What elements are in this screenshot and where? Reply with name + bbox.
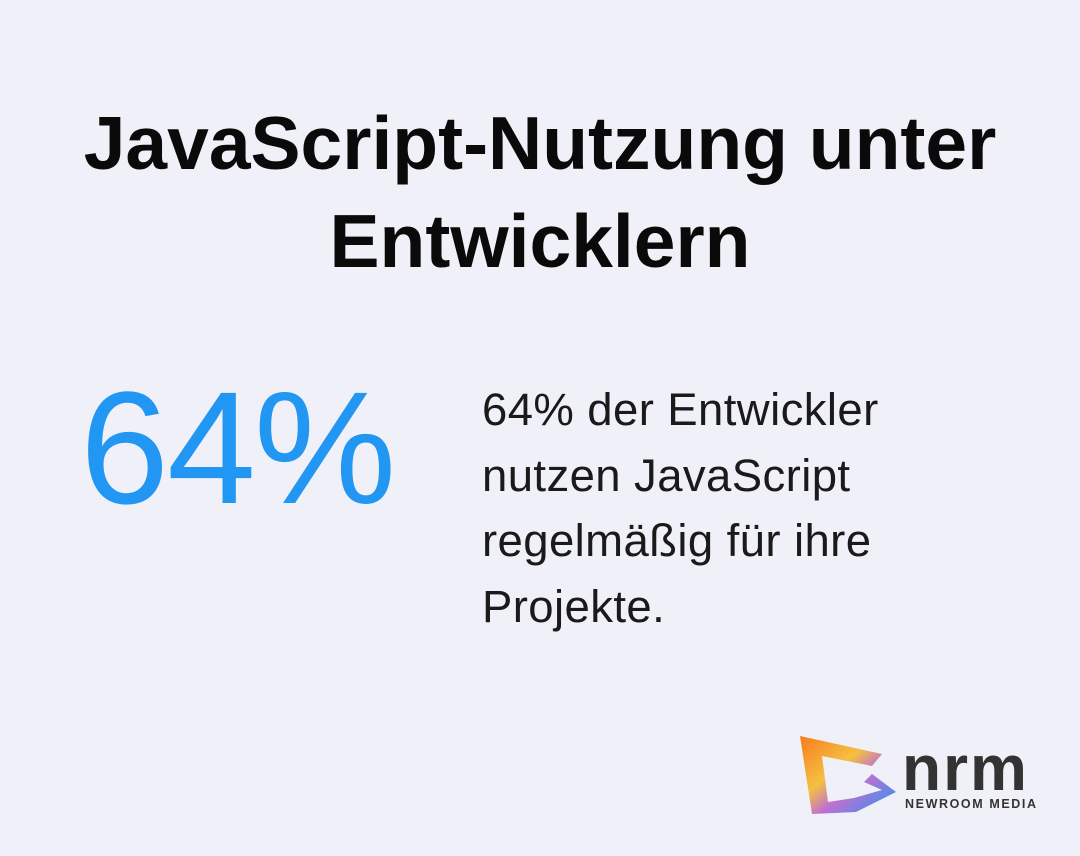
brand text: nrm [902, 734, 1029, 804]
description text: nutzen JavaScript [482, 450, 850, 500]
title: JavaScript-Nutzung unter [84, 101, 996, 185]
big statistic: 64% [80, 358, 394, 537]
description text: regelmäßig für ihre [482, 515, 871, 566]
logo: newroom media [800, 734, 1038, 814]
brand text: NEWROOM MEDIA [905, 797, 1038, 811]
description text [482, 384, 879, 632]
title: Entwicklern [330, 199, 750, 283]
description text: 64% der Entwickler [482, 384, 879, 435]
icon [800, 736, 896, 814]
title [84, 101, 996, 283]
description text: Projekte. [482, 580, 665, 632]
